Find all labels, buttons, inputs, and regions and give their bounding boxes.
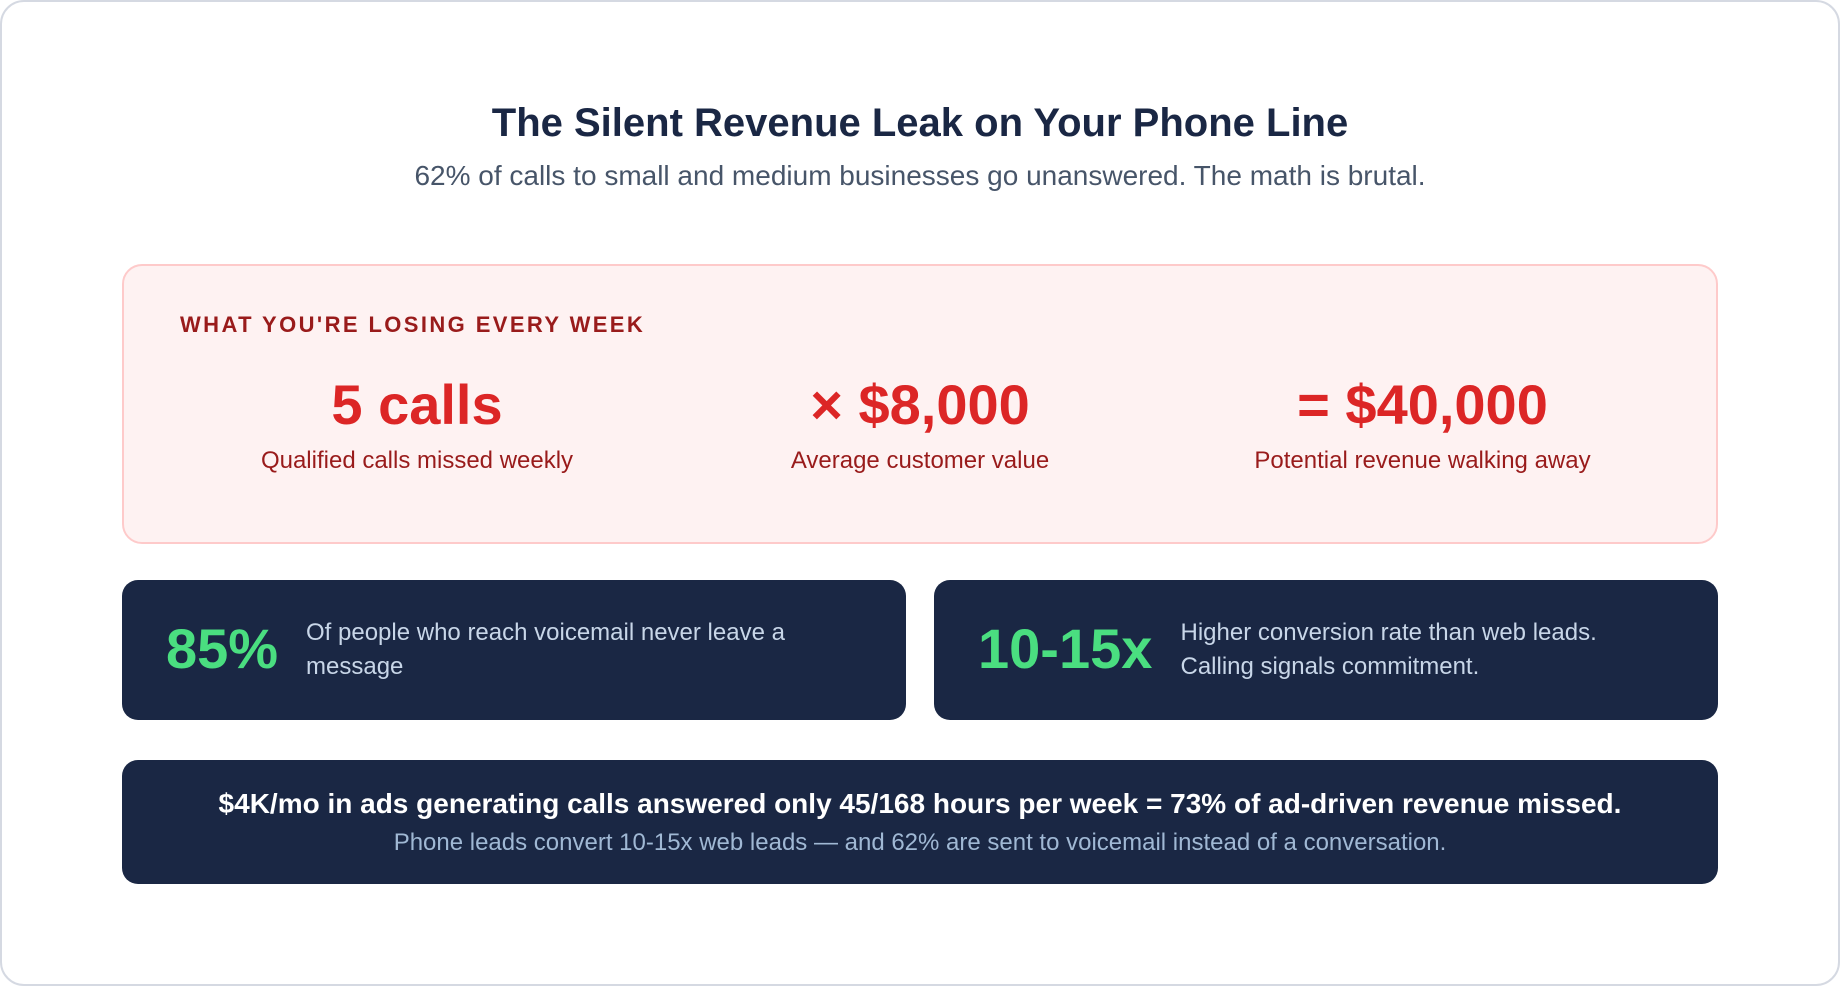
card description: message	[306, 653, 403, 680]
label: revenue lost: Potential revenue walking away	[1254, 447, 1591, 474]
big number: 85%: 85%	[166, 617, 278, 680]
card description	[1180, 619, 1597, 680]
banner subtext: Phone leads convert 10-15x web leads — and 62% are sent to voicemail instead of a conversation.	[394, 829, 1446, 856]
label: calls missed: Qualified calls missed weekly	[261, 447, 573, 474]
stat: revenue lost: = $40,000	[1297, 373, 1548, 436]
stat: calls missed: 5 calls	[331, 373, 503, 436]
panel: weekly losses	[122, 264, 1718, 544]
banner headline: $4K/mo in ads generating calls answered only 45/168 hours per week = 73% of ad-driven revenue missed.	[219, 788, 1621, 819]
card: voicemail stat	[122, 580, 906, 720]
panel heading: WHAT YOU'RE LOSING EVERY WEEK	[180, 312, 645, 337]
big number: 10-15x: 10-15x	[978, 617, 1152, 680]
stat: customer value: × $8,000	[810, 373, 1030, 436]
card description	[306, 619, 785, 680]
card description: Of people who reach voicemail never leave a	[306, 619, 785, 646]
title: The Silent Revenue Leak on Your Phone Line	[492, 101, 1348, 145]
label: customer value: Average customer value	[791, 447, 1049, 474]
subtitle: 62% of calls to small and medium businesses go unanswered. The math is brutal.	[414, 160, 1426, 191]
card: conversion stat	[934, 580, 1718, 720]
banner: bottom summary	[122, 760, 1718, 884]
card description: Higher conversion rate than web leads.	[1180, 619, 1597, 646]
card description: Calling signals commitment.	[1180, 653, 1479, 680]
